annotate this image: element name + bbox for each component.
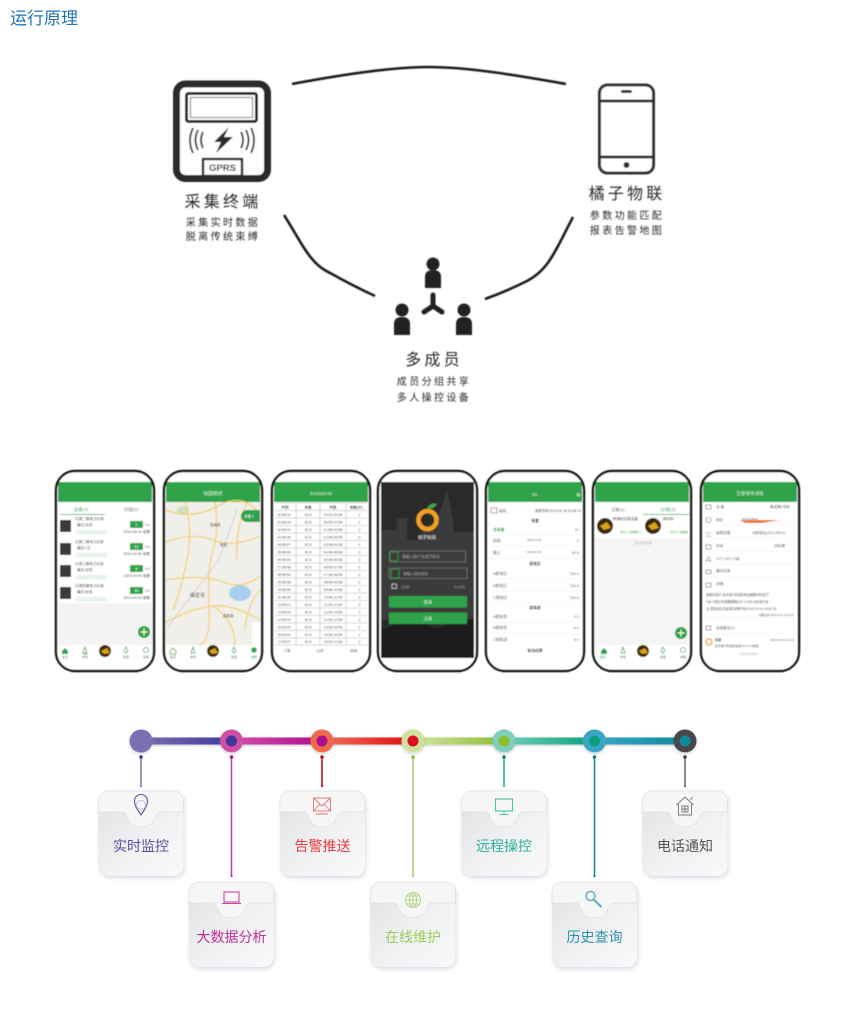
card: 在线维护: 在线维护 xyxy=(385,929,441,945)
phone: device list: 天燕二楼电力仪表 xyxy=(75,539,104,544)
icon: monitor xyxy=(496,799,512,814)
node 4 xyxy=(402,730,424,753)
table text: 11:58:59 xyxy=(277,596,291,600)
phone: meter detail: B相电压 xyxy=(493,583,507,588)
card: 远程操控 xyxy=(462,791,546,876)
phone: device list: 分组(2) xyxy=(124,506,139,513)
arc: terminal to app xyxy=(292,67,566,84)
table text: 52.8 xyxy=(305,528,311,532)
table text: 00:01-00:58 xyxy=(324,513,342,517)
phone: meter detail: 0 xyxy=(577,539,579,543)
phone: device list: 2019-04-09 查看 xyxy=(123,551,150,556)
phone: alarm event detail: 2019-03-04 16:31:13 xyxy=(770,638,795,642)
phone: alarm event detail: 尊敬的用户,机术部1号机新电流越限详情如下 xyxy=(706,592,770,597)
table text: 时间 xyxy=(282,504,289,510)
table text: 52.8 xyxy=(305,573,311,577)
phone: groups: 地图 xyxy=(680,654,686,659)
phone: meter detail: 230.4 xyxy=(569,572,579,576)
icon: smartphone xyxy=(600,85,654,173)
table text: .0 xyxy=(358,566,361,570)
connector: 在线维护 xyxy=(411,755,415,877)
phone: alarm event detail: 集成第1号机 xyxy=(770,504,790,509)
phone: groups: 新增的试架设备 xyxy=(613,516,639,521)
text: members description: 成员分组共享 xyxy=(397,375,471,388)
arc: terminal to members xyxy=(284,215,375,296)
heading: collection terminal: 采集终端 xyxy=(185,193,261,211)
phone: meter detail: 有功功率 xyxy=(527,648,543,653)
phone: login: 忘记密码 xyxy=(454,585,465,589)
phone: device list: 2019-04-09 查看 xyxy=(123,529,150,534)
node 5 xyxy=(492,730,516,753)
phone: groups: 首页 xyxy=(600,654,606,659)
icon: envelope xyxy=(314,798,330,814)
icon: location pin xyxy=(134,794,148,815)
title: 运行原理 xyxy=(10,9,78,28)
phone: meter detail: 230.6 xyxy=(569,584,579,588)
phone: meter detail: 0.0 xyxy=(574,626,579,630)
table text: .0 xyxy=(358,640,361,644)
phone: meter detail: 2019-04-28 xyxy=(527,550,542,554)
phone: device list: Kw xyxy=(145,589,150,593)
phone: alarm event detail: 保定市新市 xyxy=(742,517,759,522)
table text: .0 xyxy=(358,633,361,637)
icon: magnifier xyxy=(586,892,602,907)
timeline bar xyxy=(141,738,685,744)
table text: 时段 xyxy=(330,504,337,510)
table text: 12:59-14:59 xyxy=(324,618,342,622)
connector: 远程操控 xyxy=(502,755,506,787)
phone: device list: 设备(4) xyxy=(74,506,89,513)
table text: .0 xyxy=(358,618,361,622)
phone: groups xyxy=(593,471,691,671)
icon: collection terminal: GPRS xyxy=(209,163,236,174)
phone: meter detail: 相电流 xyxy=(529,605,541,610)
phone: alarm event detail: B相电压[20.6-258.0] xyxy=(753,530,785,535)
phone: device list xyxy=(56,471,154,671)
table text: 52.8 xyxy=(305,588,311,592)
icon: globe xyxy=(406,892,420,908)
table text: .0 xyxy=(358,588,361,592)
table text: 02:58:43 xyxy=(277,528,291,532)
phone: meter detail: 0.0 xyxy=(574,638,579,642)
table text: 03:58-04:58 xyxy=(324,543,342,547)
phone: map mode: 查看 2 xyxy=(244,514,254,518)
card: 电话通知 xyxy=(642,791,728,876)
phone: meter detail: 52.8 xyxy=(572,551,579,555)
table text: 09:58-10:58 xyxy=(324,588,342,592)
card: 大数据分析 xyxy=(189,882,274,967)
node 2 xyxy=(220,730,243,753)
table text: 电量 xyxy=(304,504,312,510)
table text: 14:59-15:59 xyxy=(324,626,342,630)
table text: 06:58:54 xyxy=(277,558,291,562)
phone: meter detail: A相电压 xyxy=(493,571,507,576)
text: orange IoT description: 参数功能匹配 xyxy=(590,209,664,222)
phone screens row xyxy=(56,471,799,671)
text: collection terminal description xyxy=(186,216,260,243)
table text: 11:58-12:59 xyxy=(324,603,342,607)
table text: 08:58:54 xyxy=(277,573,291,577)
table text: 09:58:58 xyxy=(277,580,291,584)
phone: meter detail: 总电量 xyxy=(493,527,505,532)
phone: map mode: 保定市 xyxy=(190,592,205,599)
phone: device list: 8 xyxy=(135,566,138,571)
phone: device list: 地图 xyxy=(143,654,149,659)
phone: login xyxy=(378,471,477,671)
table text: 刷新 xyxy=(350,648,358,653)
table text: 17:59:07 xyxy=(277,640,291,644)
icon: members xyxy=(394,258,472,335)
table text: 10:58:55 xyxy=(277,588,291,592)
card: 告警推送: 告警推送 xyxy=(294,838,350,854)
table text: .0 xyxy=(358,558,361,562)
card: 实时监控: 实时监控 xyxy=(113,838,169,854)
phone: meter detail: 起始 xyxy=(493,538,501,543)
phone: map mode xyxy=(164,471,262,671)
phone: device list: 天燕二楼电力仪表 xyxy=(75,516,104,521)
table text: 52.8 xyxy=(305,558,311,562)
phone: groups: 共享2 | 设备数 4 xyxy=(620,530,640,534)
table text: 07:58:58 xyxy=(277,566,291,570)
table text: 电量(小) xyxy=(350,504,362,510)
table text: .0 xyxy=(358,610,361,614)
table text: 52.8 xyxy=(305,580,311,584)
table text: .0 xyxy=(358,543,361,547)
table text: 下载 xyxy=(283,648,291,653)
diagram: operating principle xyxy=(176,67,665,404)
table text xyxy=(277,504,362,653)
table text: .0 xyxy=(358,528,361,532)
phone: meter detail: 52 xyxy=(575,528,579,532)
phone: map mode: 告警 xyxy=(190,654,196,659)
table text: .0 xyxy=(358,520,361,524)
phone: map mode: 高阳县 xyxy=(223,613,234,618)
table text: 12:59-13:59 xyxy=(324,610,342,614)
table text: 52.8 xyxy=(305,633,311,637)
phone: meter detail: 相电压 xyxy=(529,561,541,566)
card: 在线维护 xyxy=(370,882,456,967)
phone: map mode: 首页 xyxy=(170,654,176,659)
heading: members: 多成员 xyxy=(405,351,463,369)
table grid xyxy=(275,503,367,645)
table text: 02:58-03:58 xyxy=(324,536,342,540)
phone: meter detail: C相电流 xyxy=(493,637,507,642)
phone: device list: 2019-04-09 查看 xyxy=(123,573,150,578)
table text: 52.8 xyxy=(305,596,311,600)
table text: 52.8 xyxy=(305,603,311,607)
table text: 05:58:59 xyxy=(277,550,291,554)
phone: meter detail: 9A xyxy=(532,492,538,497)
table text: 分享 xyxy=(316,648,324,653)
phone: map mode: 地图 xyxy=(251,654,257,659)
table text: 00:58-01:58 xyxy=(324,520,342,524)
text: collection terminal description: 脱离传统束缚 xyxy=(186,230,260,243)
table text: 01:58-02:58 xyxy=(324,528,342,532)
table text: 03:58:46 xyxy=(277,536,291,540)
phone: meter detail: 返回 xyxy=(499,508,507,513)
table text: 52.8 xyxy=(305,513,311,517)
table text: .0 xyxy=(358,550,361,554)
table text: 13:59:00 xyxy=(277,610,291,614)
phone: meter detail: B相电流 xyxy=(493,625,507,630)
phone: device list: 最后:在线 xyxy=(77,567,93,572)
text: members description: 多人操控设备 xyxy=(397,391,471,404)
phone: device list: Kw xyxy=(145,567,150,571)
table text: .0 xyxy=(358,513,361,517)
phone: groups: 告警 xyxy=(620,654,626,659)
table text: 04:58:57 xyxy=(277,543,291,547)
timeline xyxy=(130,730,696,753)
phone: alarm event detail: 创建时间:2019-03-04 15:51:30 xyxy=(759,613,795,617)
phone: meter detail: 电量 xyxy=(531,518,539,523)
phone: meter detail: C相电压 xyxy=(493,595,507,600)
table text: 52.8 xyxy=(305,550,311,554)
phone: alarm event detail: 详情 xyxy=(716,581,724,586)
text: orange IoT description xyxy=(590,209,664,237)
text: members description xyxy=(397,375,471,404)
phone: meter detail: 0.0 xyxy=(574,615,579,619)
table text: 10:58-11:58 xyxy=(324,596,342,600)
phone: groups: 收藏 xyxy=(660,654,666,659)
table text: 12:59:01 xyxy=(277,603,291,607)
phone: login: 请输入账户名或手机号 xyxy=(402,554,440,559)
phone: alarm event detail: 设 备 xyxy=(716,504,725,509)
phone: device list: 收藏 xyxy=(123,654,129,659)
phone: login: 登录 xyxy=(424,598,432,604)
table text: 16:59:02 xyxy=(277,633,291,637)
phone: alarm event detail: 没有更多数据了 xyxy=(740,652,760,656)
phone: device list: 告警 xyxy=(82,654,88,659)
phone: meter detail: 截止 xyxy=(493,550,501,555)
connector: 电话通知 xyxy=(683,755,687,787)
card: 实时监控 xyxy=(98,791,184,876)
card: 历史查询 xyxy=(552,882,637,967)
phone: groups: 分组(2) xyxy=(660,506,676,513)
phone: groups: 共享1 | 设备数 xyxy=(670,530,688,534)
phone: alarm event detail: 17℃-23℃小雨 xyxy=(716,556,740,561)
table text: 15:59-16:59 xyxy=(324,633,342,637)
phone: device list: 最后:在线 xyxy=(77,589,93,594)
table text: 00:58:43 xyxy=(277,513,291,517)
phone: device list: 52 xyxy=(134,544,139,549)
phone: alarm event detail: 全部备注(1) xyxy=(716,625,735,630)
phone: device list: 最后:在线 xyxy=(77,522,93,527)
heading: orange IoT: 橘子物联 xyxy=(589,185,665,203)
phone: alarm event detail: 通讯记录 xyxy=(716,568,731,573)
phone: alarm event detail: 机术部1号机新电流[220.0-2]告警 xyxy=(715,643,759,648)
phone: login: 请输入您的密码 xyxy=(403,571,429,576)
table text: 01:58:43 xyxy=(277,520,291,524)
phone: meter detail: 230.8 xyxy=(569,596,579,600)
table text: .0 xyxy=(358,573,361,577)
card: 远程操控: 远程操控 xyxy=(476,838,532,854)
connector: 告警推送 xyxy=(320,755,324,787)
phone: data table xyxy=(272,471,370,671)
phone: device list: 首页 xyxy=(62,654,68,659)
node 7 xyxy=(674,730,696,753)
phone: groups: 新料料 xyxy=(663,516,674,521)
phone: map mode: 收藏 xyxy=(231,654,237,659)
phone: map mode: 地图模式 xyxy=(203,490,223,497)
phone: meter detail: A相电流 xyxy=(493,614,507,619)
table text: 52.8 xyxy=(305,566,311,570)
phone: device list: 最后:7天 xyxy=(77,545,91,550)
table text: 52.8 xyxy=(305,618,311,622)
table text: 06:58-07:58 xyxy=(324,566,342,570)
phone: meter detail xyxy=(486,471,584,671)
table text: 52.8 xyxy=(305,626,311,630)
table text: 05:58-06:58 xyxy=(324,558,342,562)
connector: 实时监控 xyxy=(139,755,143,787)
phone: alarm event detail: 地址 xyxy=(716,517,724,522)
node 3 xyxy=(310,730,334,753)
table text: 52.8 xyxy=(305,536,311,540)
icon: collection terminal xyxy=(176,84,268,178)
phone: alarm event detail xyxy=(701,471,799,671)
phone: map mode: 雄县 xyxy=(220,542,228,547)
phone: device list: 1 xyxy=(135,522,138,527)
phone: device list: 40 xyxy=(134,588,139,593)
table text: 08:58-09:58 xyxy=(324,580,342,584)
icon: house xyxy=(676,797,694,815)
phone: groups: 没有更多数据 xyxy=(634,540,652,545)
phone: alarm event detail: 状态 xyxy=(716,543,724,548)
table text: .0 xyxy=(358,536,361,540)
phone: map mode: 容城县 xyxy=(210,522,221,527)
phone: meter detail: 编 xyxy=(576,492,580,497)
table text: .0 xyxy=(358,596,361,600)
table text: 52.8 xyxy=(305,610,311,614)
phone: alarm event detail: 为B-C相比传感器限额[220.0-258.0]请及时关 xyxy=(706,599,769,604)
phone: meter detail: 更新时间:2019-04-28 10:58:10 xyxy=(535,508,581,513)
table text: 14:59:00 xyxy=(277,618,291,622)
connector: 大数据分析 xyxy=(230,755,233,877)
phone: device list: Kw xyxy=(145,523,150,527)
table text: 52.8 xyxy=(305,640,311,644)
card: 大数据分析: 大数据分析 xyxy=(196,929,266,945)
arc: app to members xyxy=(485,217,573,299)
card: 电话通知: 电话通知 xyxy=(657,838,713,854)
phone: alarm event detail: 注,您接收后请处理,告警时间:2019-03-04 15:51:30 xyxy=(706,606,777,611)
phone: alarm event detail: 系统 xyxy=(715,637,722,642)
table text: 16:59-17:59 xyxy=(324,640,342,644)
phone: login: 记住我 xyxy=(401,585,410,589)
phone: data table: 9A2019-04 xyxy=(310,491,333,496)
table text: .0 xyxy=(358,603,361,607)
table text: 04:58-05:58 xyxy=(324,550,342,554)
icon: laptop xyxy=(222,892,241,904)
phone: device list: 天燕三楼电力仪表 xyxy=(75,561,104,566)
phone: device list: Kw xyxy=(145,545,150,549)
phone: device list: 2019-04-09 查看 xyxy=(123,595,150,600)
phone: alarm event detail: 告警事件详情 xyxy=(736,490,764,497)
text: orange IoT description: 报表告警地图 xyxy=(590,224,664,237)
connector: 历史查询 xyxy=(593,755,596,877)
phone: alarm event detail: 待处理 xyxy=(774,543,785,548)
phone: login: 橘子物联 xyxy=(418,534,436,541)
table text: .0 xyxy=(358,580,361,584)
table text: 52.8 xyxy=(305,543,311,547)
phone: login: 注册 xyxy=(424,615,432,622)
table text: 07:58-08:58 xyxy=(324,573,342,577)
node 6 xyxy=(583,730,606,753)
phone: device list: 天燕四楼电力仪表 xyxy=(75,583,104,588)
text: collection terminal description: 采集实时数据 xyxy=(186,216,260,229)
node 1 xyxy=(130,730,152,752)
phone: groups: 设备(4) xyxy=(612,506,625,512)
phone: alarm event detail: 越限范围 xyxy=(716,530,731,535)
table text: .0 xyxy=(358,626,361,630)
table text: 52.8 xyxy=(305,520,311,524)
card: 历史查询: 历史查询 xyxy=(566,929,622,945)
table text: 15:59:00 xyxy=(277,626,291,630)
phone: meter detail: 2019-04-09 xyxy=(527,538,542,542)
card: 告警推送 xyxy=(280,791,365,876)
